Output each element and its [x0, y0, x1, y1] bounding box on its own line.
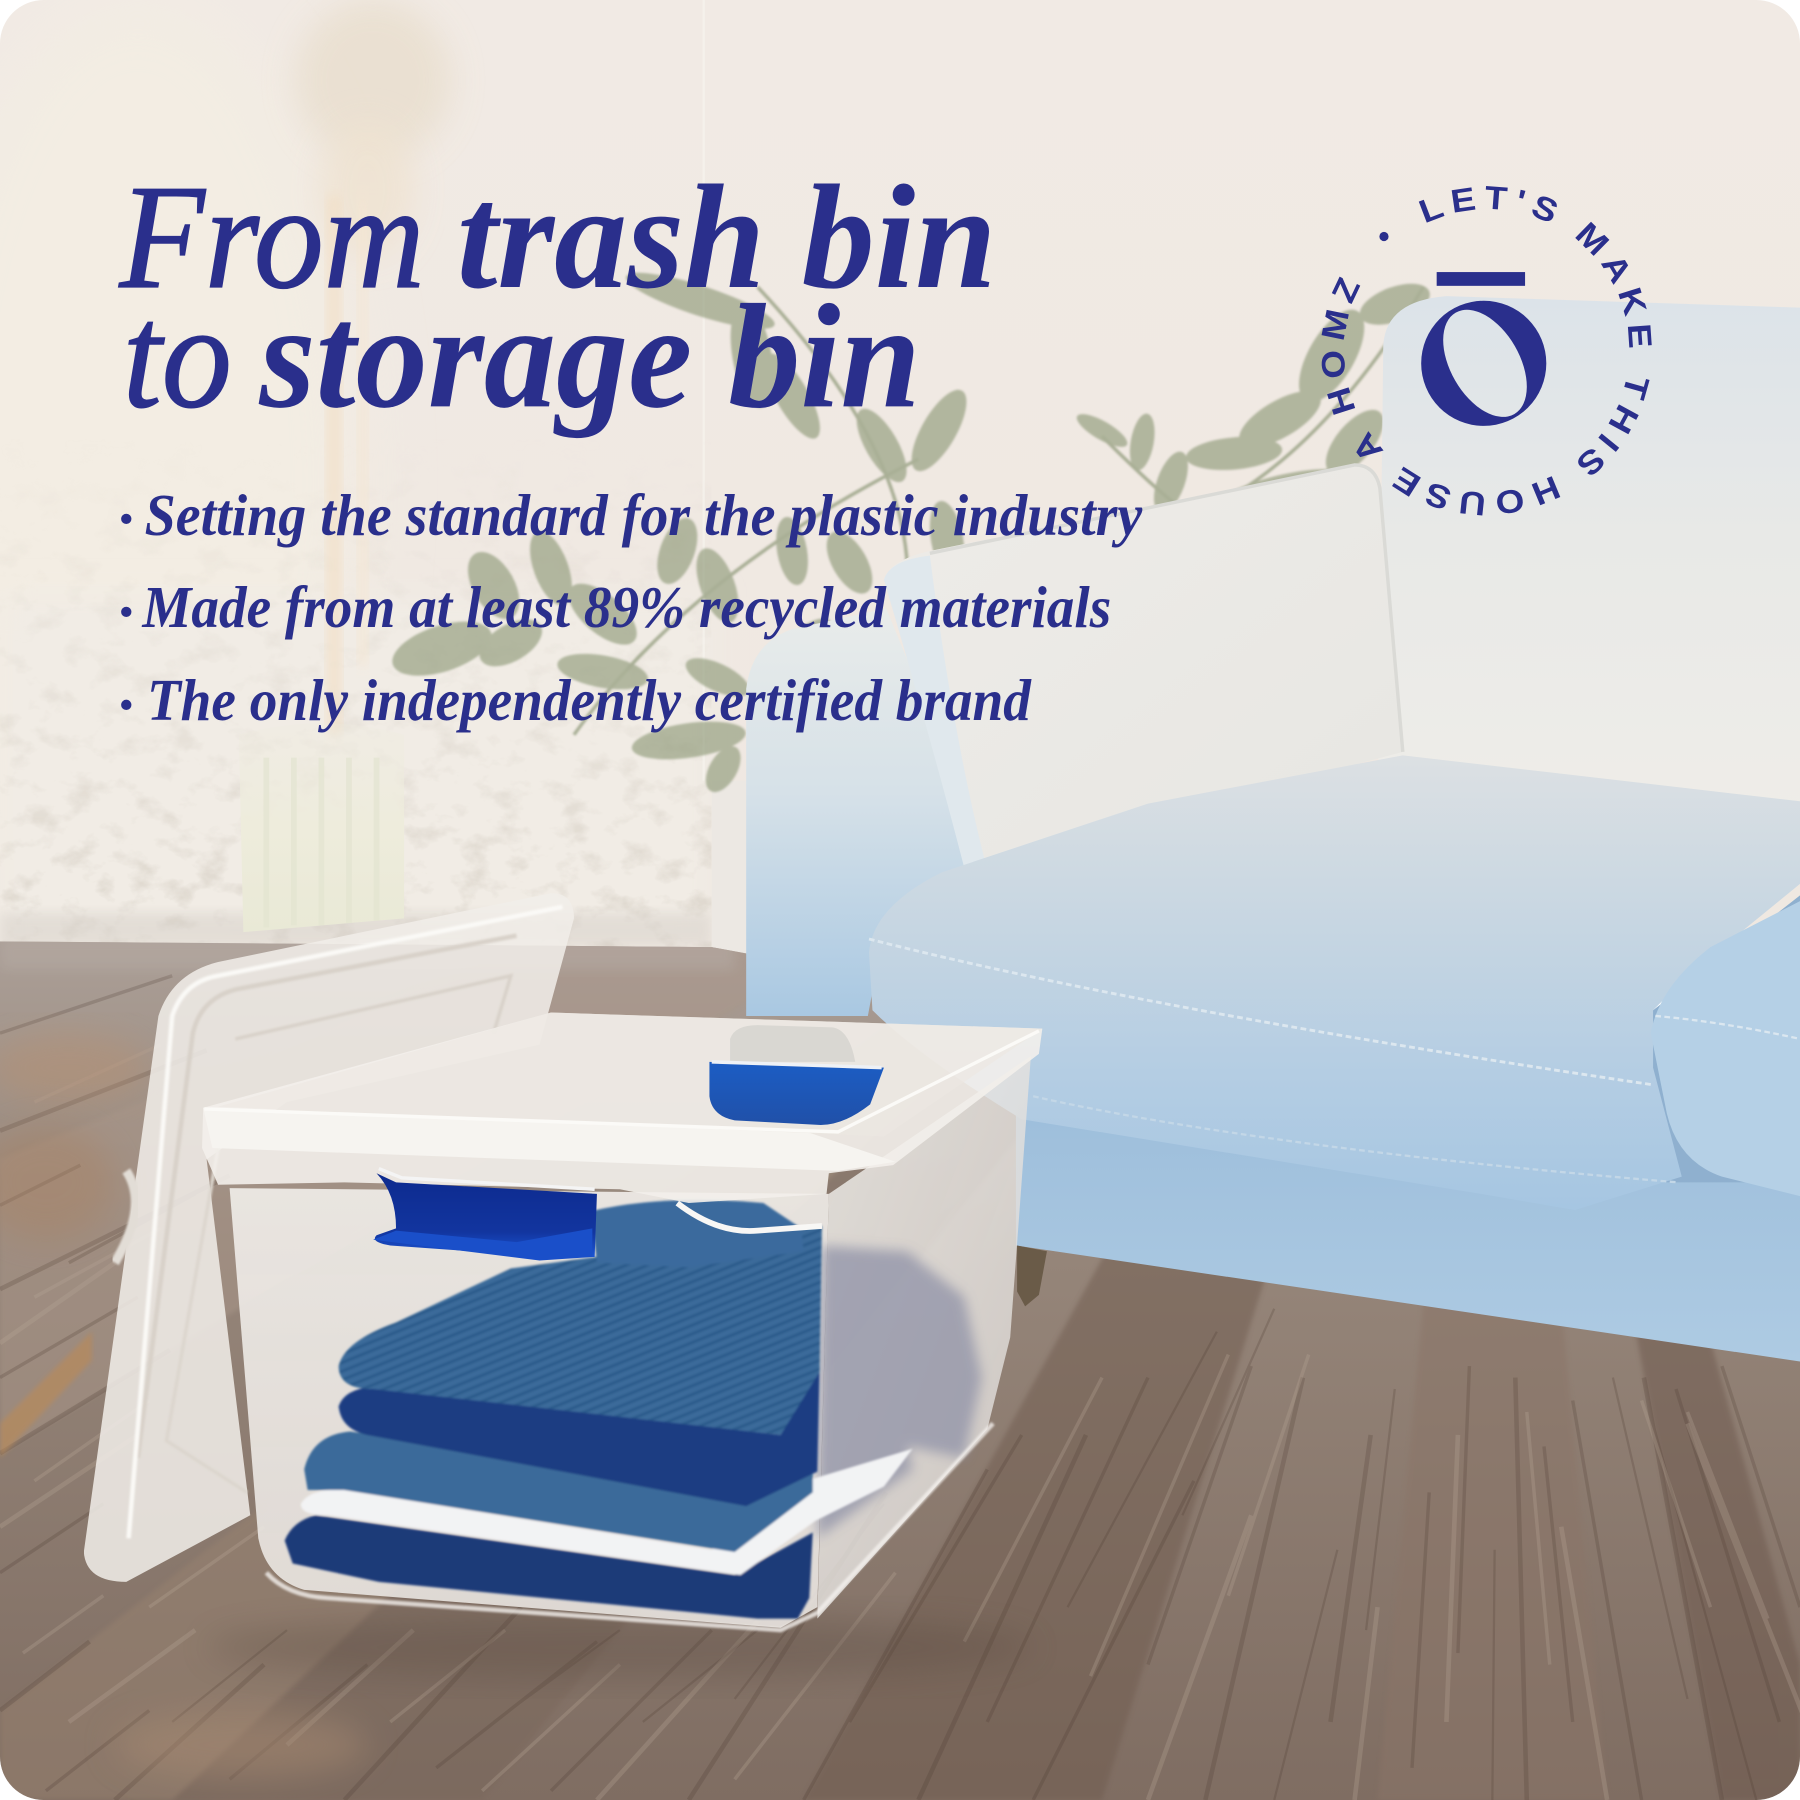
near handle [373, 1169, 597, 1260]
ring dot [1379, 232, 1389, 241]
floor dark grain streaks [0, 976, 1800, 1800]
storage bin [84, 893, 1042, 1630]
bullet list: Setting the standard for the plastic industry [145, 482, 1143, 548]
headline [118, 155, 996, 439]
far handle [709, 1025, 884, 1125]
bullet list: Made from at least 89% recycled materials [141, 574, 1111, 640]
right seat cushion [1651, 901, 1800, 1196]
folded clothes stack [285, 1200, 913, 1619]
sofa arm [746, 608, 987, 1016]
background: wall [0, 0, 1800, 1010]
headline: From [118, 155, 425, 320]
sofa back [1382, 296, 1800, 533]
leaning lid [84, 893, 574, 1582]
clothes seen through bin side [817, 1246, 982, 1538]
circular logo badge [1322, 186, 1652, 516]
rear sweater [591, 1200, 804, 1267]
bin rim [202, 1012, 1042, 1203]
headline: trash bin [457, 155, 996, 320]
vase [242, 758, 404, 932]
logo bar [1437, 272, 1525, 286]
white garment [301, 1449, 913, 1575]
navy bottom garment [285, 1515, 813, 1619]
floor light grain streaks [0, 1340, 1800, 1800]
ring text: LET'S MAKE THIS HOUSE A HOMZ [1322, 186, 1652, 516]
sofa leg [1017, 1246, 1047, 1306]
mid blue sweater [304, 1432, 813, 1552]
white strap inside bin [677, 1203, 822, 1231]
gap behind cushions [1573, 895, 1800, 1217]
bin lower edge highlight [266, 1423, 993, 1630]
logo o mark [1421, 301, 1546, 426]
plant leaves [386, 262, 1435, 798]
headline: to [123, 274, 232, 439]
bin side wall [817, 1056, 1031, 1619]
dark blue sweater [339, 1366, 820, 1506]
back cushion [903, 466, 1356, 858]
sofa [746, 296, 1800, 1361]
pampas grass and stems [295, 0, 451, 735]
sofa base [1016, 1102, 1800, 1361]
bin front wall [230, 1188, 829, 1628]
bullet list: The only independently certified brand [147, 667, 1032, 733]
bullet list [121, 482, 1143, 733]
ribbed top sweater [339, 1226, 822, 1435]
headline: storage bin [258, 274, 921, 439]
wooden floor [0, 942, 1800, 1800]
seat cushion [869, 755, 1800, 1210]
